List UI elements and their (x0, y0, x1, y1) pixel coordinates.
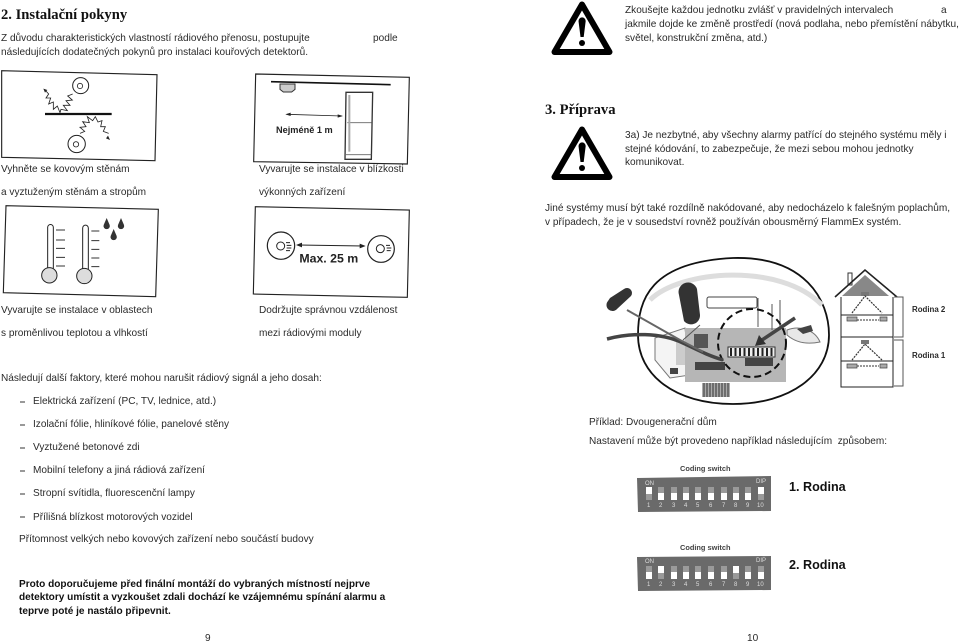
switch: family 2: ON (645, 559, 654, 565)
switch: family 2: 9 (746, 582, 750, 588)
switch: family 2: 8 (734, 582, 738, 588)
text block: spacing caption: mezi rádiovými moduly (259, 328, 362, 339)
text block: warning top: Zkoušejte každou jednotku zvlášť v pravidelných intervalech (625, 5, 893, 16)
text block: temperature caption (1, 305, 152, 339)
switch: family 1: 5 (696, 503, 700, 509)
switch: family 2: 5 (696, 582, 700, 588)
label: 2. Rodina: 2. Rodina (789, 558, 846, 572)
switch: family 2: 3 (672, 582, 676, 588)
text block: example: Nastavení může být provedeno například následujícím způsobem: (589, 436, 887, 447)
switch: family 2: 1 (647, 582, 651, 588)
text block: recommendation (19, 579, 386, 617)
panel: maximum distance diagram: Max. 25 m (299, 252, 358, 266)
page number 9: 9 (205, 633, 211, 644)
switch: family 1: 6 (709, 503, 713, 509)
panel: maximum distance diagram (252, 206, 410, 298)
text block: temperature caption: Vyvarujte se instalace v oblastech (1, 305, 152, 316)
panel: metal walls diagram (1, 70, 158, 162)
heading: section 2: 2. Instalační pokyny (1, 7, 127, 23)
text block: warning top: jakmile dojde ke změně prostředí (nová podlaha, nebo přemístění nábytku, (625, 19, 959, 30)
label: minimum distance: Nejméně 1 m (276, 125, 333, 135)
text block: recommendation: detektory umístit a vyzkoušet zdali dochází ke vzájemnému spínání alarmu a (19, 592, 385, 603)
panel: thermometers diagram (2, 205, 159, 298)
text: podle: podle (373, 33, 398, 44)
text block: warning 3a: komunikovat. (625, 157, 684, 168)
text block: warning 3a (625, 130, 947, 168)
switch: family 1: 4 (684, 503, 688, 509)
switch: family 1: 1 (647, 503, 651, 509)
text block: appliances caption: výkonných zařízení (259, 187, 345, 198)
text block: warning top (624, 5, 959, 44)
text block: appliances caption (259, 164, 404, 198)
text block: metal walls caption: Vyhněte se kovovým stěnám (1, 164, 129, 175)
text block: factors intro: Následují další faktory, které mohou narušit rádiový signál a jeho dosah: (1, 373, 322, 384)
page number 10: 10 (747, 633, 758, 644)
text block: other systems (545, 202, 950, 228)
switch: family 2: 6 (709, 582, 713, 588)
text block: metal walls caption: a vyztuženým stěnám a stropům (1, 187, 146, 198)
switch: family 2: Coding switch (680, 543, 731, 552)
text block: appliances caption: Vyvarujte se instalace v blízkosti (259, 164, 404, 175)
switch: family 1 (637, 464, 771, 512)
list: interference factors: Elektrická zařízení (PC, TV, lednice, atd.) (33, 396, 216, 407)
switch: family 2: 4 (684, 582, 688, 588)
list: interference factors: Izolační fólie, hliníkové fólie, panelové stěny (33, 419, 229, 430)
label: 1. Rodina: 1. Rodina (789, 480, 846, 494)
switch: family 1: 9 (746, 503, 750, 509)
switch: family 1: 3 (672, 503, 676, 509)
switch: family 2: 2 (659, 582, 663, 588)
switch: family 1: 2 (659, 503, 663, 509)
switch: family 2: 7 (722, 582, 726, 588)
switch: family 2: DIP (756, 558, 766, 564)
diagram: two-family house (834, 269, 904, 388)
panel: appliance distance diagram (253, 73, 410, 165)
switch: family 1: Coding switch (680, 464, 731, 473)
switch: family 2: 10 (757, 582, 764, 588)
text block: intro left: následujících dodatečných pokynů pro instalaci kouřových detektorů. (1, 47, 308, 58)
list: interference factors: Přílišná blízkost motorových vozidel (33, 512, 193, 523)
list: interference factors: Přítomnost velkých nebo kovových zařízení nebo součástí budovy (19, 534, 314, 545)
list: interference factors: Mobilní telefony a jiná rádiová zařízení (33, 465, 205, 476)
diagram: detector internals (606, 257, 830, 405)
text block: recommendation: Proto doporučujeme před finální montáží do vybraných místností nejprve (19, 579, 370, 590)
switch: family 1: 7 (722, 503, 726, 509)
text block: spacing caption: Dodržujte správnou vzdálenost (259, 305, 397, 316)
heading: section 3: 3. Příprava (545, 102, 616, 118)
text block: example: Příklad: Dvougenerační dům (589, 417, 717, 428)
switch: family 1: DIP (756, 479, 766, 485)
text block: recommendation: teprve poté je nastálo připevnit. (19, 606, 171, 617)
icon: warning triangle middle (552, 126, 612, 180)
text block: warning 3a: stejné kódování, to zabezpečuje, že mezi sebou mohou jednotky (625, 144, 914, 155)
label: family 1: Rodina 1 (912, 351, 945, 360)
text block: temperature caption: s proměnlivou teplotou a vlhkostí (1, 328, 148, 339)
text block: example (589, 416, 887, 447)
switch: family 1: 10 (757, 503, 764, 509)
text block: intro left: Z důvodu charakteristických vlastností rádiového přenosu, postupujte (1, 33, 310, 44)
label: family 2: Rodina 2 (912, 305, 945, 314)
text block: warning top: a (941, 5, 947, 16)
text block: intro left (1, 32, 310, 58)
text block: warning top: světel, konstrukční změna, atd.) (625, 33, 767, 44)
text block: spacing caption (259, 305, 398, 339)
list: interference factors: Stropní svítidla, fluorescenční lampy (33, 488, 195, 499)
icon: warning triangle top (552, 2, 612, 55)
switch: family 1: 8 (734, 503, 738, 509)
switch: family 2 (637, 543, 771, 591)
text block: other systems: Jiné systémy musí být také rozdílně nakódované, aby nedocházelo k falešným poplachům, (545, 203, 950, 214)
list: interference factors: Vyztužené betonové zdi (33, 442, 140, 453)
switch: family 1: ON (645, 481, 654, 487)
text block: warning 3a: 3a) Je nezbytné, aby všechny alarmy patřící do stejného systému měly i (625, 130, 947, 141)
list: interference factors (19, 396, 314, 545)
text block: metal walls caption (1, 164, 146, 198)
text block: other systems: v případech, že je v sousedství rovněž používán obousměrný FlammEx systém. (545, 217, 901, 228)
